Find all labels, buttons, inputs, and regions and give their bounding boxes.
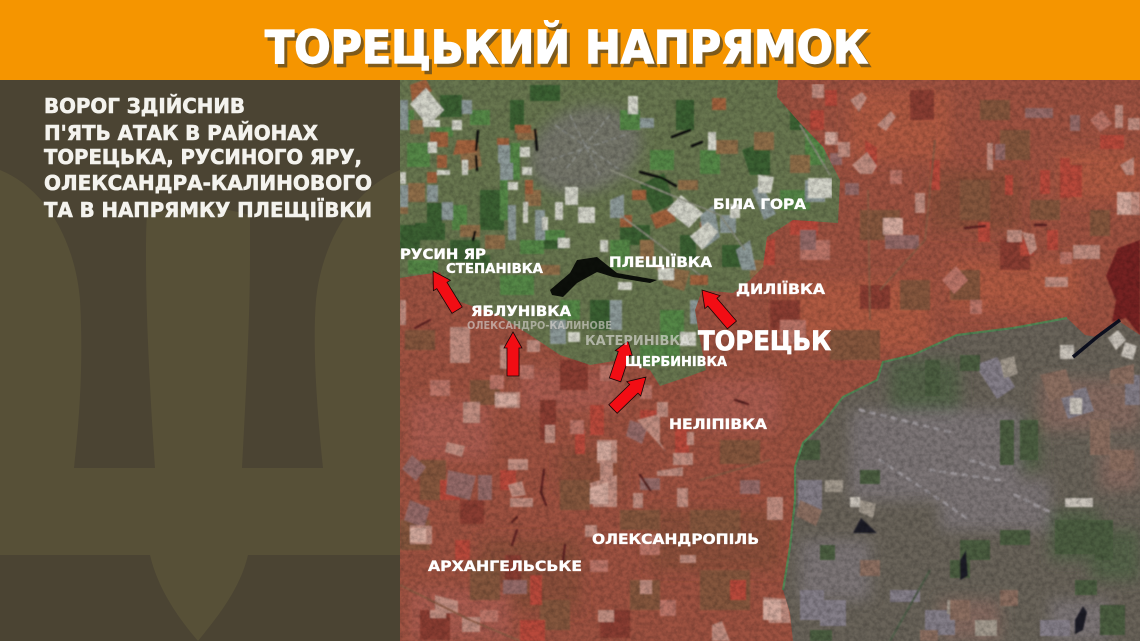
olive-brown fields	[400, 100, 1110, 630]
attack arrows	[424, 266, 740, 416]
red zone tonal areas	[410, 90, 1140, 640]
salmon fields	[430, 110, 1112, 622]
grey zone tonal areas	[890, 360, 1140, 580]
label: Arkhanhelske: АРХАНГЕЛЬСЬКЕ	[428, 559, 582, 575]
description text: ТОРЕЦЬКА, РУСИНОГО ЯРУ,	[44, 145, 362, 169]
label: Oleksandro-Kalynove: ОЛЕКСАНДРО-КАЛИНОВЕ	[467, 320, 612, 332]
header bar	[0, 0, 1140, 80]
grey fields	[798, 357, 1140, 636]
blue-grey fields	[400, 100, 825, 344]
orange-brown fields	[410, 79, 726, 285]
dark red fields	[420, 90, 1030, 640]
label: Nelipivka: НЕЛІПІВКА	[669, 417, 767, 433]
label: Rusyn Yar: РУСИН ЯР	[400, 247, 486, 263]
label: Katerynivka: КАТЕРИНІВКА	[585, 333, 691, 349]
dark green fields	[400, 85, 810, 330]
description text: П'ЯТЬ АТАК В РАЙОНАХ	[44, 121, 319, 145]
map base: red occupied zone	[400, 80, 1140, 641]
lake by front line	[1073, 320, 1120, 357]
title: ТОРЕЦЬКИЙ НАПРЯМОК	[268, 24, 871, 78]
label: Shcherbynivka: ЩЕРБИНІВКА	[625, 355, 727, 370]
grey zone water	[853, 518, 1087, 634]
arrow: Kateryniivka	[607, 338, 637, 383]
red occupied zone fields	[400, 84, 1140, 641]
mid green fields	[400, 110, 825, 365]
city lights	[860, 410, 1050, 520]
description text	[44, 94, 372, 222]
reservoir	[550, 257, 657, 297]
pink fields	[400, 84, 1140, 641]
lower-right grey zone	[780, 310, 1140, 641]
map	[400, 79, 1140, 641]
label: Pleshchiivka: ПЛЕЩІЇВКА	[609, 254, 712, 271]
arrow: Shcherbynivka	[606, 370, 653, 416]
left text panel	[0, 80, 400, 641]
label: Toretsk: ТОРЕЦЬК	[698, 326, 831, 357]
title: ТОРЕЦЬКИЙ НАПРЯМОК	[265, 21, 868, 74]
front-line border	[783, 318, 1067, 590]
arrow: Toretsk	[694, 283, 740, 331]
green controlled zone	[400, 79, 850, 400]
river and ravines in red zone	[1106, 240, 1140, 335]
light fields	[410, 132, 1131, 620]
label: Stepanivka: СТЕПАНІВКА	[446, 262, 543, 277]
brown fields	[400, 120, 810, 291]
ravines	[473, 130, 702, 240]
label: Yablunivka: ЯБЛУНІВКА	[471, 304, 571, 320]
bright red fields	[440, 90, 1124, 641]
town	[526, 103, 644, 197]
town streets	[550, 115, 625, 175]
white fields	[400, 88, 832, 346]
description text: ВОРОГ ЗДІЙСНИВ	[44, 94, 245, 118]
trident watermark	[0, 170, 400, 641]
arrow: Oleksandro-Kalynove	[504, 332, 522, 376]
map texture	[400, 80, 1140, 641]
description text: ТА В НАПРЯМКУ ПЛЕЩІЇВКИ	[44, 198, 372, 222]
mauve fields	[402, 108, 1080, 594]
label: Oleksandropil: ОЛЕКСАНДРОПІЛЬ	[592, 532, 759, 548]
label: Bila Hora: БІЛА ГОРА	[713, 197, 806, 213]
description text: ОЛЕКСАНДРА-КАЛИНОВОГО	[44, 171, 372, 195]
map place labels	[400, 197, 831, 575]
arrow: Rusyn Yar	[424, 266, 466, 315]
label: Dyliivka: ДИЛІЇВКА	[736, 281, 825, 298]
